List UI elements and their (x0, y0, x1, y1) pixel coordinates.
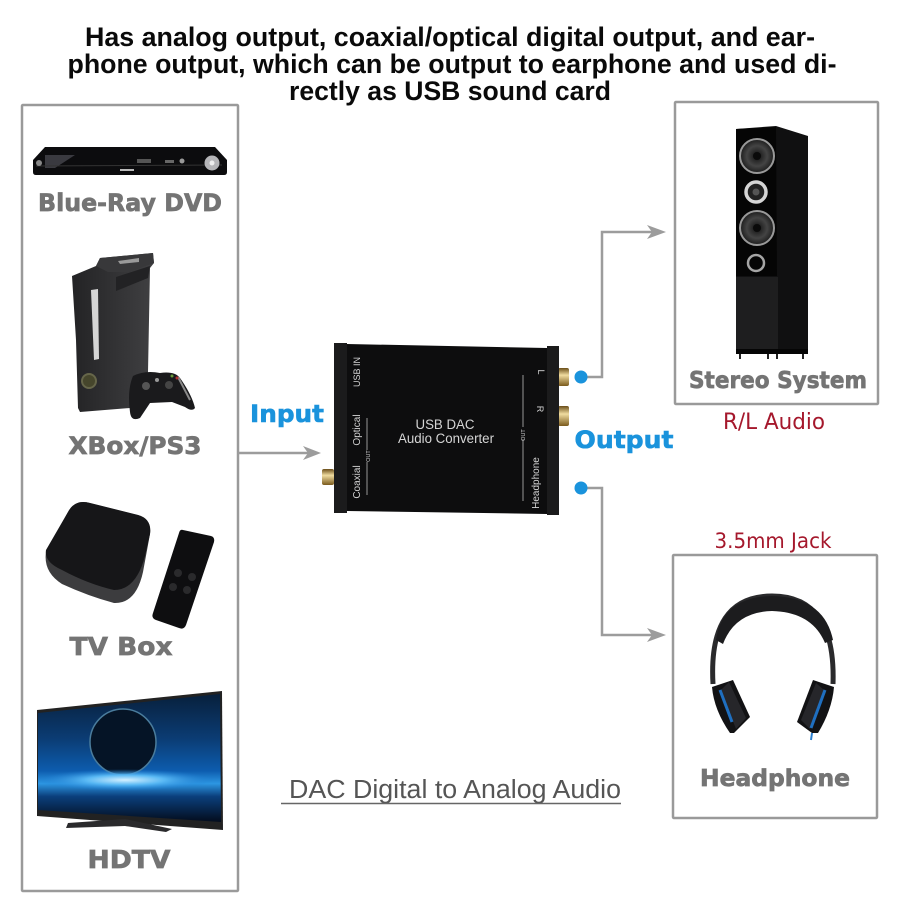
label: 3.5mm Jack: 3.5mm Jack (714, 529, 832, 553)
icon: headphones (712, 596, 834, 740)
title: phone output, which can be output to earphone and used di- (68, 49, 836, 79)
device: USB DAC audio converter: L (536, 369, 546, 375)
device: USB DAC audio converter: Headphone (531, 457, 542, 509)
label: R/L Audio: R/L Audio (723, 410, 825, 435)
connector: output to headphone (574, 482, 666, 642)
device: USB DAC audio converter: USB IN (352, 357, 362, 387)
label: Headphone: Headphone (700, 766, 850, 792)
label: Stereo System: Stereo System (689, 368, 867, 394)
arrow: input to converter (238, 446, 321, 460)
device: USB DAC audio converter: OUT (521, 429, 527, 441)
icon: game console and controller (72, 253, 195, 419)
device: USB DAC audio converter: USB DAC (416, 417, 475, 432)
icon: TV box and remote (46, 502, 214, 629)
label: Input: Input (250, 400, 324, 428)
device: USB DAC audio converter: Audio Converter (398, 431, 494, 446)
panel: stereo system (675, 102, 878, 404)
title (68, 22, 836, 106)
connector: output to stereo system (574, 225, 666, 384)
icon: Blue-Ray DVD player (33, 147, 227, 175)
device: USB DAC audio converter: Optical (352, 414, 363, 446)
icon: tower speaker (736, 126, 808, 359)
label: Output: Output (574, 426, 674, 454)
panel: input sources (22, 105, 238, 891)
device: USB DAC audio converter: R (535, 406, 545, 413)
caption: DAC Digital to Analog Audio: DAC Digital to Analog Audio (289, 776, 621, 804)
title: Has analog output, coaxial/optical digital output, and ear- (85, 22, 815, 52)
device: USB DAC audio converter: OUT (366, 450, 372, 462)
title: rectly as USB sound card (289, 76, 611, 106)
panel: headphone (673, 555, 877, 818)
label: HDTV: HDTV (88, 845, 171, 874)
label: TV Box: TV Box (70, 632, 172, 661)
device: USB DAC audio converter: Coaxial (352, 465, 363, 499)
label: Blue-Ray DVD: Blue-Ray DVD (38, 189, 222, 217)
device: USB DAC audio converter (322, 343, 569, 515)
icon: HDTV (37, 691, 223, 832)
label: XBox/PS3: XBox/PS3 (68, 432, 202, 460)
